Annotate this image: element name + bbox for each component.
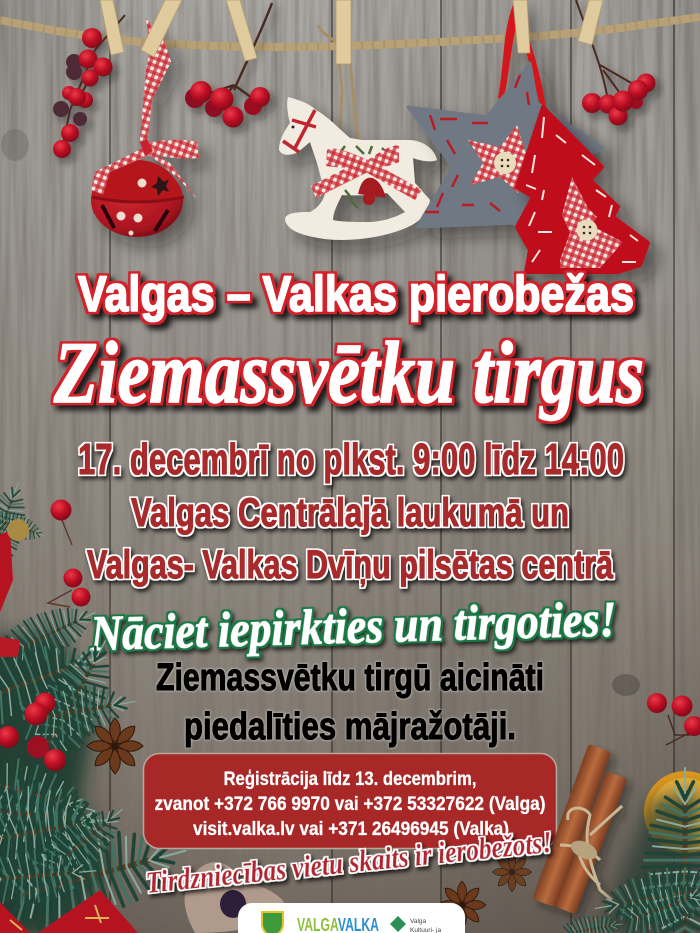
logo: Valga Kultuuri- ja: Valga [410,918,426,925]
dried orange slice [644,771,700,853]
berries on left edge [48,500,90,607]
cinnamon sticks tied with twine [532,744,627,914]
registration deadline: Reģistrācija līdz 13. decembrim, [224,769,476,790]
rocking horse ornament [279,97,437,240]
right evergreen branches [562,768,700,933]
jingle bell ornament with ribbon [91,18,199,237]
logo: Valga coat of arms [262,912,283,933]
slogan: Nāciet iepirkties un tirgoties!: Nāciet iepirkties un tirgoties! [89,590,617,661]
red ribbon on left edge [0,519,29,657]
right berries [647,693,700,745]
notice: Tirdzniecības vietu skaits ir ierobežots!: Tirdzniecības vietu skaits ir ierobežots! [144,824,554,900]
berry cluster left [53,15,125,158]
invitation line one: Ziemassvētku tirgū aicināti [156,657,544,699]
star anise left [87,718,143,774]
left evergreen branches [0,475,197,933]
registration box [144,754,556,848]
berry cluster centre [185,3,272,128]
horse ribbon strings [318,20,358,140]
bottom-left red gift ribbon [0,890,138,933]
bottom decorations: anise and cookie [185,852,532,933]
logo panel [238,903,465,933]
felt Christmas tree ornament [517,107,648,272]
phone numbers: zvanot +372 766 9970 vai +372 53327622 (Valga) [154,794,546,815]
website and phone: visit.valka.lv vai +371 26496945 (Valka) [193,819,509,840]
clothespins [100,0,603,64]
invitation line two: piedalīties mājražotāji. [184,706,516,748]
berries on evergreen [0,692,66,771]
twine rope [0,17,700,47]
felt star ornament [408,0,603,240]
berry cluster right [576,0,656,126]
logo: Valga cultural centre icon [390,916,406,932]
location line one: Valgas Centrālajā laukumā un [131,491,569,535]
